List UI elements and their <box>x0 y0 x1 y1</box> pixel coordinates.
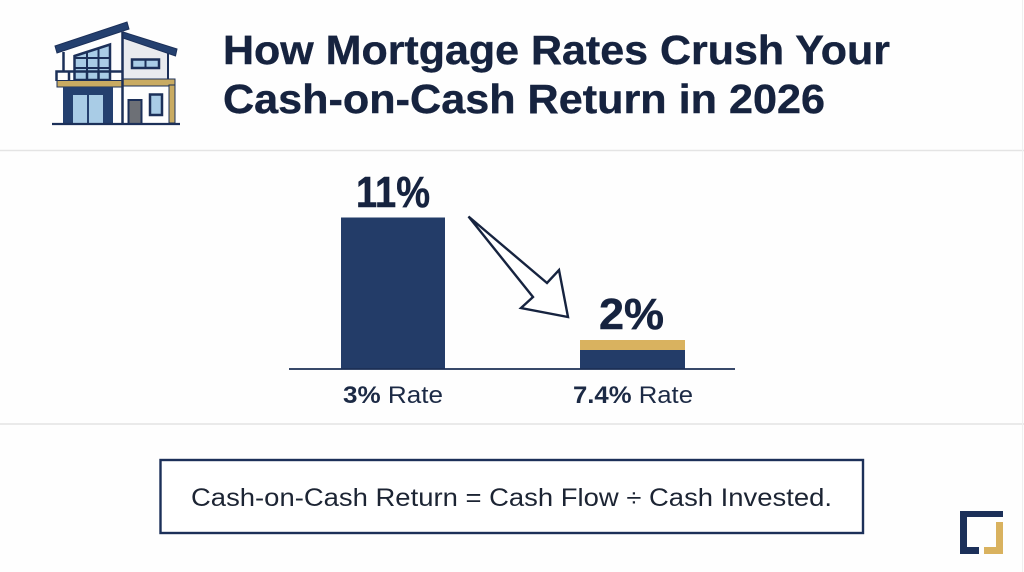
bar chart <box>289 168 735 409</box>
title <box>223 27 890 122</box>
arrow: downward trend <box>468 216 568 317</box>
chart baseline <box>289 368 735 370</box>
bar: 7.4% rate <box>580 290 685 369</box>
callout: formula <box>160 460 863 533</box>
icon: logo mark <box>960 511 1003 554</box>
bar: 7.4% rate: 2% <box>599 290 664 339</box>
title: Cash-on-Cash Return in 2026 <box>223 76 825 122</box>
icon: house <box>52 22 180 124</box>
bar: 3% rate: 11% <box>356 168 430 217</box>
label: 3% rate: 3% Rate <box>343 382 443 409</box>
callout: formula: Cash-on-Cash Return = Cash Flow ÷ Cash Invested. <box>191 484 832 512</box>
bar: 3% rate <box>341 168 445 369</box>
title: How Mortgage Rates Crush Your <box>223 27 890 73</box>
label: 7.4% rate: 7.4% Rate <box>573 382 693 409</box>
